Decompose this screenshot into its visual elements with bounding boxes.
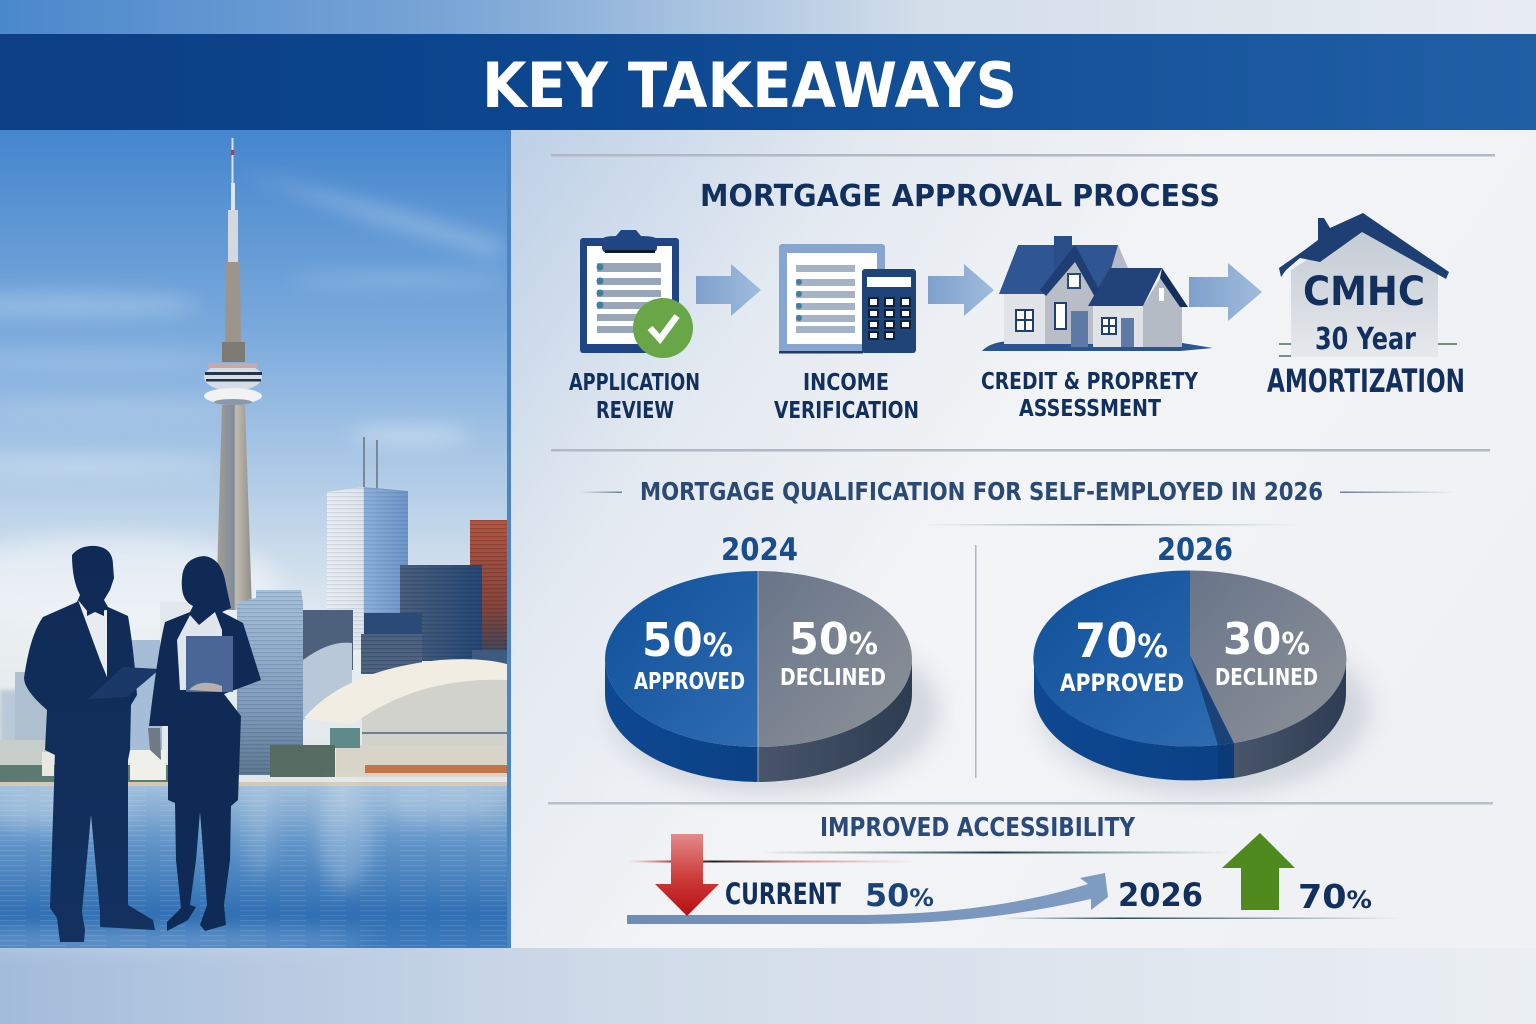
shoreline bbox=[0, 782, 507, 787]
arrow: step three to four bbox=[1189, 263, 1262, 321]
heading: mortgage qualification: MORTGAGE QUALIFICATION FOR SELF-EMPLOYED IN 2026 bbox=[640, 477, 1323, 506]
bow tie bbox=[87, 606, 104, 616]
panel: mortgage qualification charts bbox=[580, 477, 1455, 795]
sky bbox=[0, 130, 507, 790]
value: 2026: 2026 bbox=[1118, 876, 1203, 914]
label: credit and property assessment: ASSESSMENT bbox=[1019, 396, 1161, 422]
panel: improved accessibility bbox=[627, 813, 1400, 924]
label: application review bbox=[569, 370, 700, 424]
value: 30 percent declined: 30% bbox=[1223, 614, 1310, 665]
icon: document and calculator bbox=[779, 244, 916, 354]
skyscraper: white and blue tower bbox=[327, 437, 408, 650]
value: 30 percent declined bbox=[1215, 614, 1318, 691]
arrow: curved growth bbox=[627, 873, 1108, 924]
label: credit and property assessment: CREDIT & PROPRETY bbox=[981, 369, 1198, 395]
value: 50 percent declined: 50% bbox=[789, 614, 878, 665]
divider bbox=[551, 449, 1490, 452]
panel: city skyline photo bbox=[0, 130, 510, 952]
icon: clipboard with check bbox=[580, 230, 693, 358]
skyscraper: dark block bbox=[400, 565, 482, 661]
icon: green up arrow bbox=[1222, 833, 1295, 910]
skyscraper: low dark towers bbox=[303, 610, 507, 674]
pie chart: 2024 bbox=[605, 571, 940, 795]
folder bbox=[186, 636, 233, 692]
distant buildings bbox=[0, 602, 190, 782]
top background band bbox=[0, 0, 1536, 34]
year label: 2024: 2024 bbox=[721, 532, 798, 568]
heading: improved accessibility: IMPROVED ACCESSIBILITY bbox=[820, 813, 1136, 843]
text: 30 Year: 30 Year bbox=[1315, 322, 1416, 357]
divider bbox=[551, 154, 1495, 156]
panel: mortgage approval process bbox=[569, 179, 1465, 424]
value: 70 percent approved bbox=[1060, 614, 1184, 697]
tablet bbox=[88, 667, 160, 699]
value: 50 percent declined bbox=[780, 614, 886, 691]
arrow: step two to three bbox=[928, 264, 994, 316]
value: 50 percent declined: DECLINED bbox=[780, 665, 886, 691]
arrow: step one to two bbox=[696, 264, 761, 316]
vertical divider bbox=[975, 545, 976, 778]
person: woman silhouette bbox=[148, 556, 261, 931]
water reflections bbox=[0, 780, 500, 952]
heading: mortgage approval process: MORTGAGE APPROVAL PROCESS bbox=[700, 179, 1220, 214]
man shirt bbox=[78, 600, 107, 677]
title: KEY TAKEAWAYS bbox=[482, 49, 1017, 122]
label: application review: APPLICATION bbox=[569, 370, 700, 396]
label: amortization: AMORTIZATION bbox=[1267, 362, 1465, 400]
bottom background band bbox=[0, 948, 1536, 1024]
value: 50 percent approved bbox=[634, 613, 745, 695]
text: current: CURRENT bbox=[725, 877, 841, 911]
CN Tower bbox=[204, 138, 262, 610]
year label: 2026: 2026 bbox=[1157, 532, 1233, 568]
value: 70 percent approved: 70% bbox=[1075, 614, 1168, 669]
skyscraper: glass tower bbox=[237, 590, 303, 775]
value: 50 percent approved: 50% bbox=[642, 613, 733, 667]
value: 70 percent: 70% bbox=[1298, 877, 1372, 916]
clouds bbox=[0, 172, 510, 635]
divider bbox=[548, 802, 1493, 804]
text: CMHC: CMHC bbox=[1303, 269, 1425, 315]
photo frame edge bbox=[507, 130, 511, 948]
label: credit and property assessment bbox=[981, 369, 1198, 422]
icon: CMHC house bbox=[1279, 213, 1457, 357]
skyscraper: red tower bbox=[470, 520, 507, 655]
label: income verification: INCOME bbox=[803, 370, 889, 396]
label: income verification bbox=[774, 370, 919, 424]
value: 70 percent approved: APPROVED bbox=[1060, 669, 1184, 697]
water bbox=[0, 786, 507, 948]
title banner bbox=[0, 34, 1536, 130]
person: man silhouette bbox=[24, 546, 160, 942]
woman hand on folder bbox=[189, 683, 222, 692]
icon: houses bbox=[982, 236, 1213, 351]
Rogers Centre dome bbox=[270, 643, 507, 777]
woman left hand bbox=[148, 728, 161, 760]
label: application review: REVIEW bbox=[596, 398, 674, 424]
value: 50 percent approved: APPROVED bbox=[634, 669, 745, 695]
woman shirt bbox=[177, 612, 222, 690]
label: income verification: VERIFICATION bbox=[774, 398, 919, 424]
value: 30 percent declined: DECLINED bbox=[1215, 665, 1318, 691]
value: current 50 percent: 50% bbox=[865, 878, 934, 914]
panel: right content bbox=[511, 130, 1536, 948]
icon: red down arrow bbox=[655, 834, 719, 916]
pie chart: 2026 bbox=[1033, 570, 1370, 795]
